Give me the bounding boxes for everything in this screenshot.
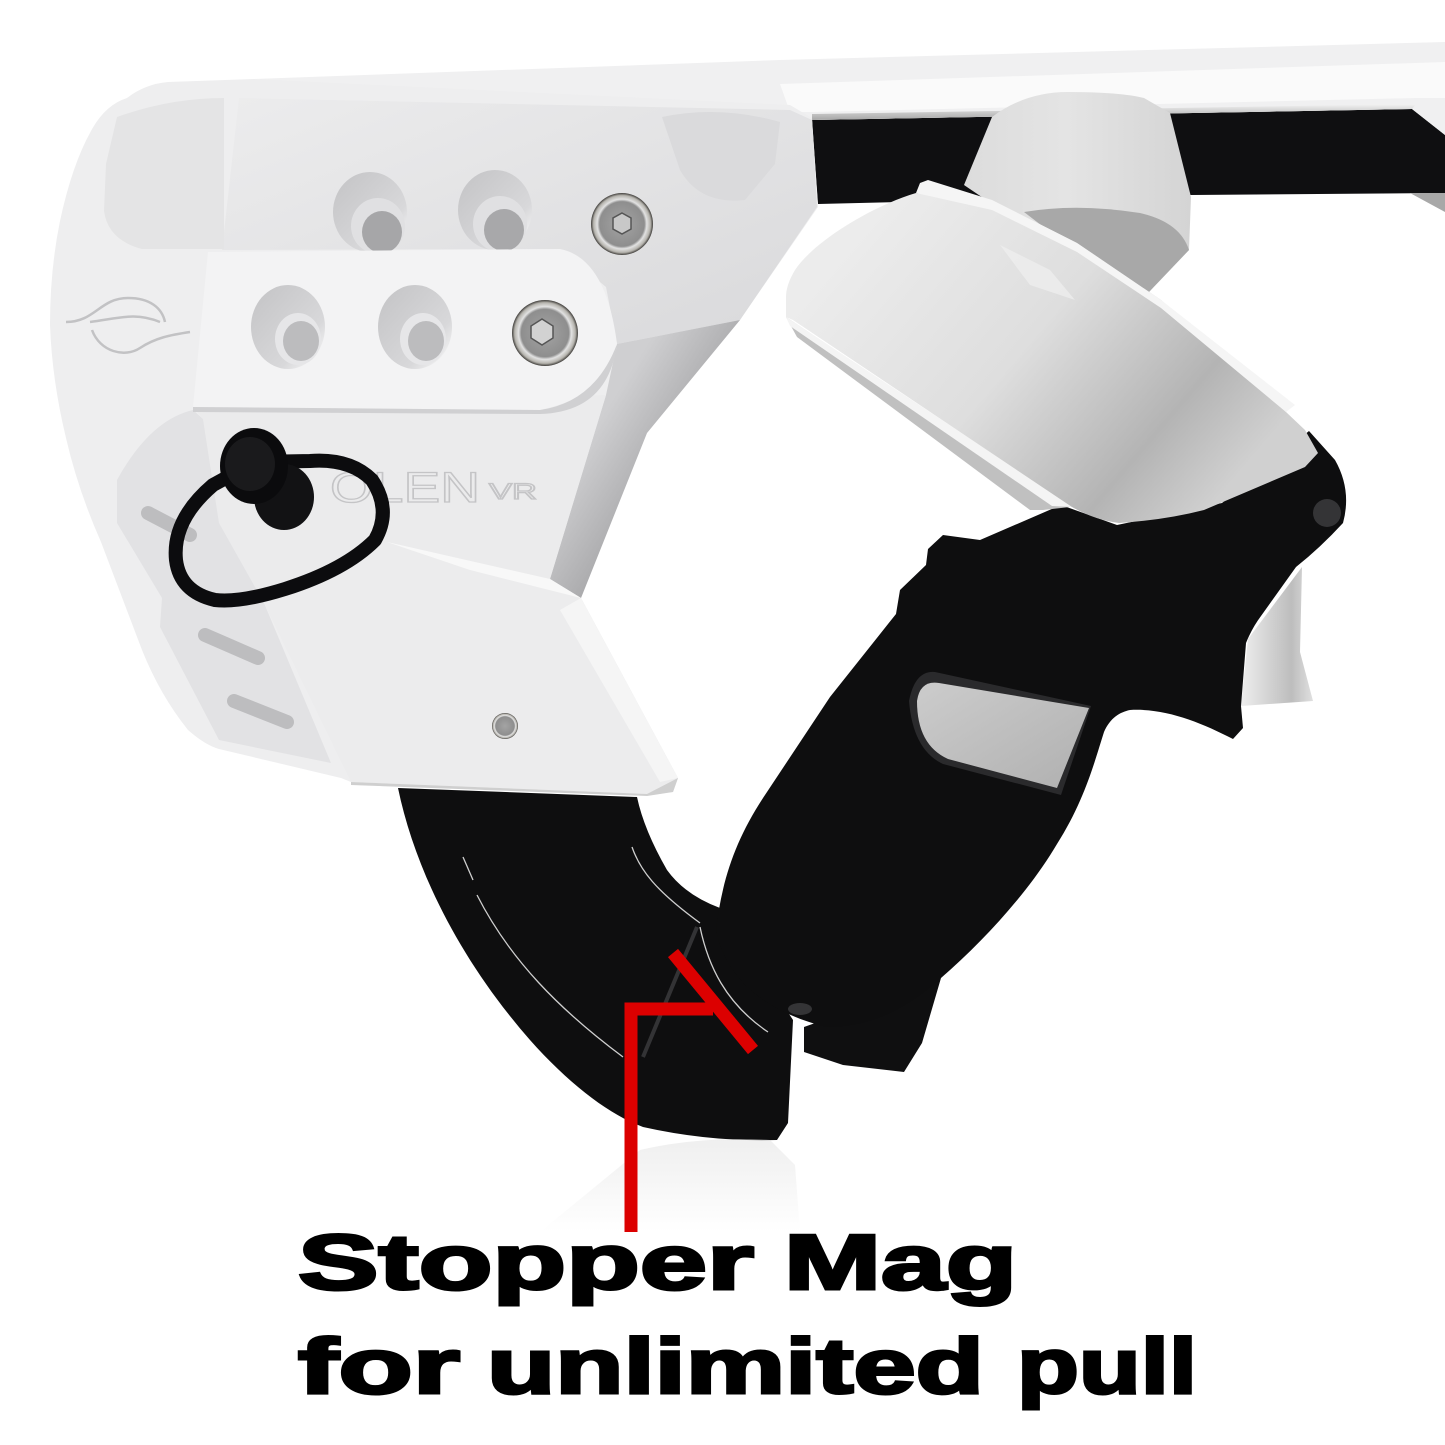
brand lettering: OLEN (330, 464, 480, 512)
callout: red leader line (631, 953, 753, 1232)
receiver panel (193, 395, 606, 603)
word: for: for (298, 1322, 460, 1410)
barrel rail (254, 42, 1445, 212)
upper adjustment holes (333, 170, 532, 254)
callout text (298, 1218, 1197, 1410)
logo leaf (66, 298, 190, 353)
lower plate (193, 249, 617, 410)
gun body (50, 79, 818, 796)
side wedge (550, 207, 817, 598)
magwell facet (264, 542, 678, 794)
magazine seam lines (463, 847, 768, 1057)
small magwell screw (492, 713, 518, 739)
head top ridge (916, 180, 1295, 412)
upper left recess (104, 98, 224, 249)
strap pivot (788, 1003, 812, 1015)
lower screw (512, 300, 578, 366)
controller head (786, 193, 1318, 523)
rear recess on the upper plate (662, 112, 780, 201)
head highlight (1000, 245, 1075, 300)
upper screw (591, 193, 653, 255)
word: pull: pull (1017, 1322, 1197, 1410)
side button (909, 672, 1091, 795)
controller bottom strap (804, 978, 941, 1072)
sling mount (176, 428, 383, 601)
controller underside strip (786, 317, 1070, 510)
stopper magazine (398, 788, 793, 1140)
rear curved recess (117, 410, 331, 763)
word: Mag: Mag (784, 1218, 1017, 1306)
upper plate (222, 98, 817, 344)
brand lettering: VR (489, 479, 537, 504)
mount puck (964, 92, 1191, 292)
controller (716, 180, 1346, 1072)
vent slats (148, 513, 287, 722)
word: Stopper: Stopper (298, 1218, 754, 1306)
grip bolt (1313, 499, 1341, 527)
lower adjustment holes (251, 285, 452, 369)
magazine reflection (540, 1139, 800, 1232)
word: unlimited: unlimited (487, 1322, 984, 1410)
brand lettering (330, 464, 537, 512)
body silhouette (50, 79, 818, 794)
controller grip (716, 431, 1346, 1027)
controller trigger (1241, 567, 1313, 706)
